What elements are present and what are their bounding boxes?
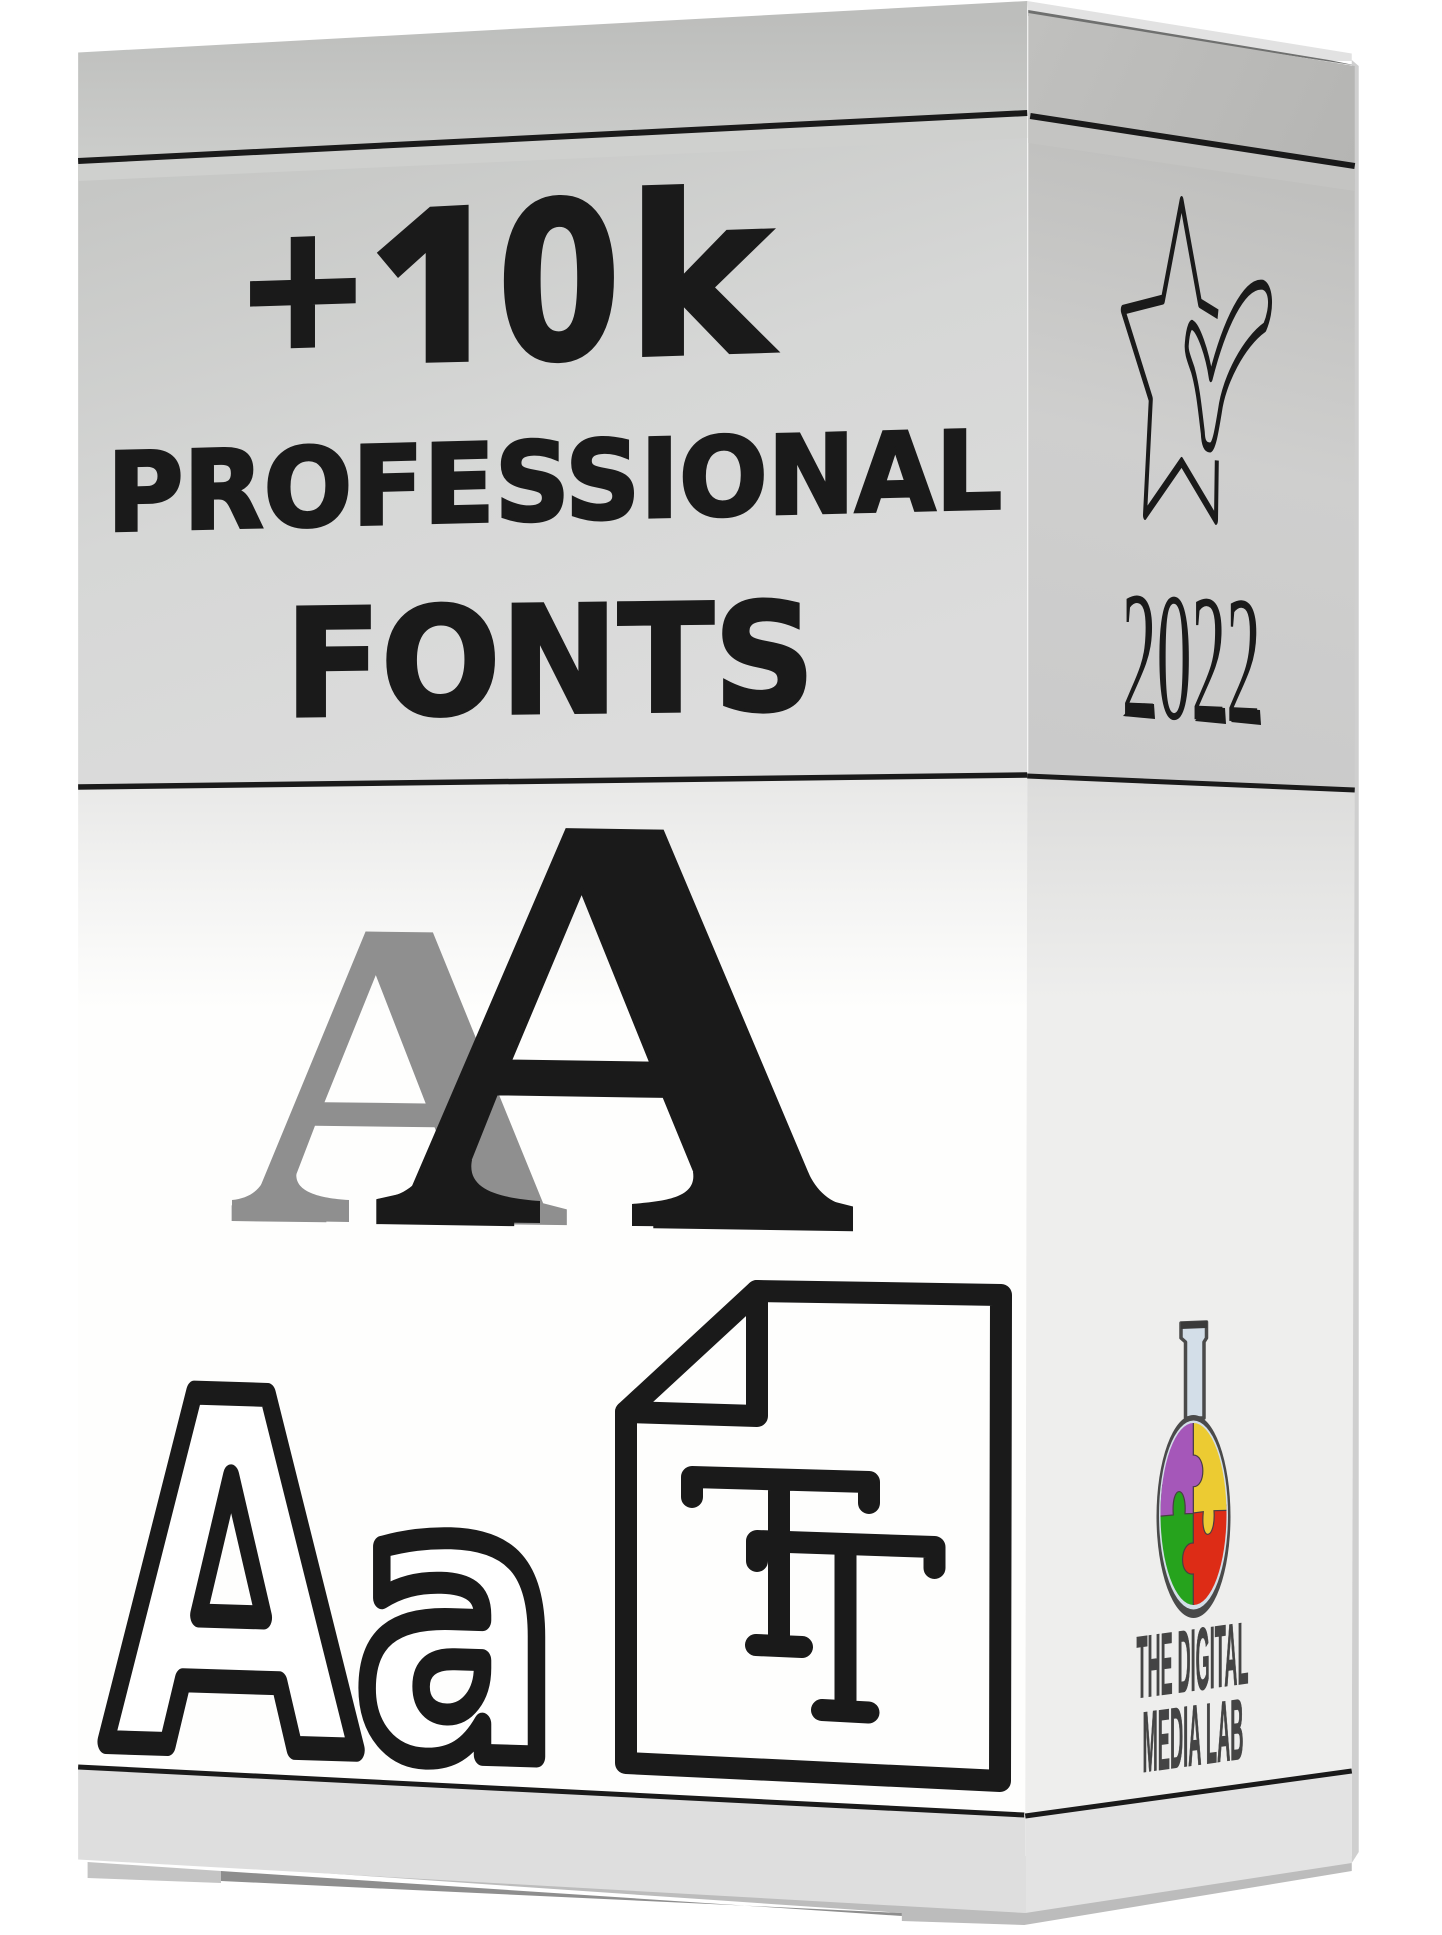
front top band xyxy=(78,1,1027,163)
logo: flask with puzzle pieces xyxy=(1156,1320,1230,1618)
headline: +10k xyxy=(250,184,780,364)
flask neck xyxy=(1181,1322,1206,1418)
front lower white panel xyxy=(78,775,1027,1816)
headline: +10k: + xyxy=(236,187,370,387)
side year label xyxy=(1122,553,1261,762)
flask bulb xyxy=(1156,1415,1230,1618)
side top band xyxy=(1028,13,1355,167)
icon: font file document with TT xyxy=(626,1291,1001,1781)
icon: grey and black serif letters A: A xyxy=(227,829,570,1321)
side lower panel xyxy=(1025,776,1355,1815)
flask cap xyxy=(1181,1321,1207,1329)
icon: star with check mark xyxy=(1123,201,1270,520)
box base flaps xyxy=(88,1856,1352,1925)
icon: grey and black serif letters A: A xyxy=(372,690,856,1359)
side bottom band xyxy=(1025,1771,1352,1913)
headline: +10k: k xyxy=(625,146,777,409)
puzzle pieces xyxy=(1160,1423,1226,1605)
icon: outlined Aa letters: A xyxy=(104,1295,361,1865)
headline: +10k: 1 xyxy=(377,160,507,417)
front face of the box xyxy=(78,1,1027,1913)
box lid sliver at top right xyxy=(1027,1,1359,66)
front title panel background xyxy=(78,112,1027,788)
headline: +10k: 0 xyxy=(497,155,621,411)
icon: outlined Aa letters: a xyxy=(354,1395,561,1849)
icon: outlined Aa letters xyxy=(104,1295,561,1865)
side middle panel xyxy=(1028,115,1355,790)
right side face of the box xyxy=(1025,13,1359,1913)
headline: PROFESSIONAL: PROFESSIONAL xyxy=(107,407,1002,557)
headline: FONTS: FONTS xyxy=(285,572,815,752)
front bottom band xyxy=(78,1767,1025,1913)
